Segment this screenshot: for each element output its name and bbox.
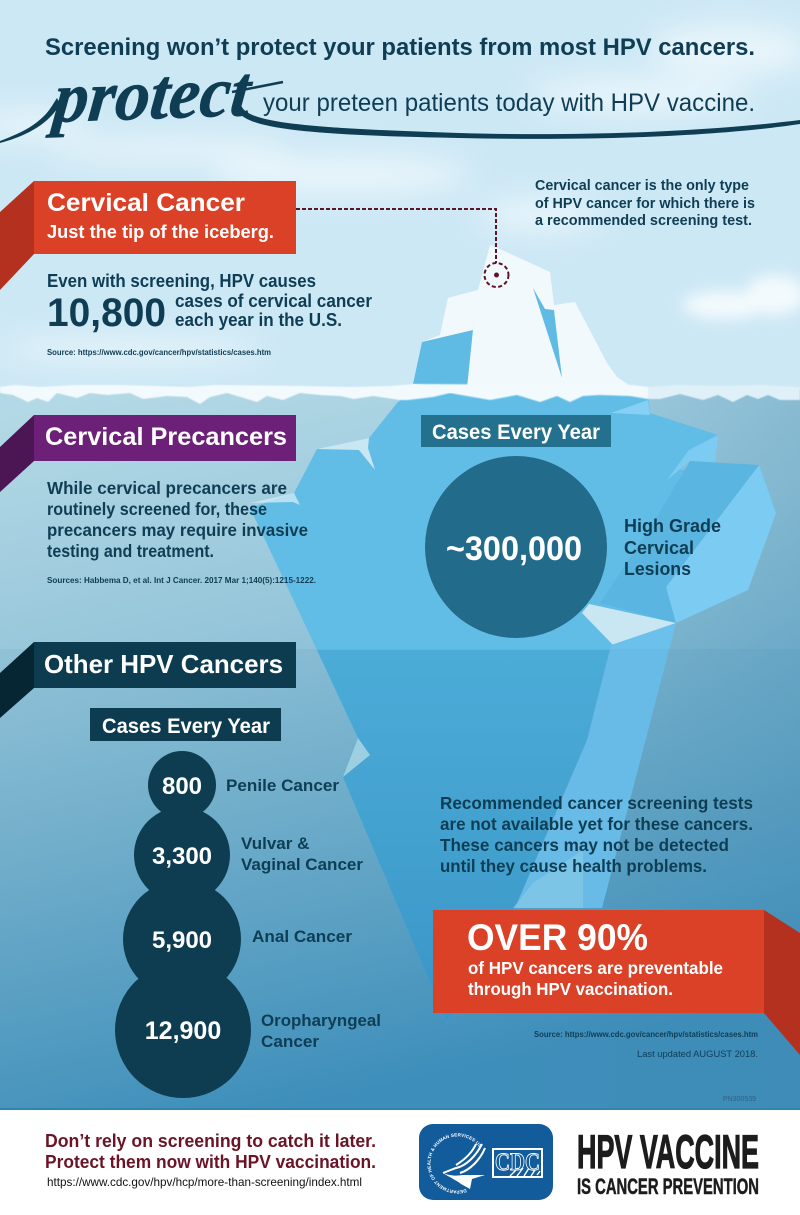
sky background	[0, 0, 800, 395]
deep water band	[0, 649, 800, 1110]
bubble chart: other HPV cancers: 5,900	[152, 927, 212, 954]
bubble chart: other HPV cancers: Anal Cancer	[252, 927, 352, 946]
iceberg below water	[250, 393, 776, 1023]
text: precancers paragraph: While cervical precancers are	[47, 478, 287, 498]
subtitle with script word: your preteen patients today with HPV vaccine.	[263, 89, 755, 117]
bubble: 300,000 lesions	[425, 456, 721, 638]
logo: HHS and CDC	[419, 1124, 553, 1200]
text: precancers paragraph: routinely screened for, these	[47, 499, 267, 519]
panel: other HPV cancers banner	[0, 642, 296, 718]
bubble chart: other HPV cancers: Oropharyngeal	[261, 1011, 381, 1030]
bubble: 300,000 lesions: Cervical	[624, 538, 694, 558]
panel: cervical precancers banner: Cervical Precancers	[45, 423, 287, 451]
foam at waterline	[0, 384, 800, 404]
logo: HHS and CDC: CDC	[495, 1149, 540, 1176]
heading: cases every year (precancers): Cases Every Year	[432, 421, 600, 444]
bubble: 300,000 lesions: Lesions	[624, 559, 691, 579]
text: precancers paragraph: testing and treatment.	[47, 541, 214, 561]
panel: over 90% banner: OVER 90%	[467, 917, 648, 958]
callout connector to iceberg tip	[296, 209, 508, 287]
iceberg above water	[410, 245, 632, 395]
source: precancers: Sources: Habbema D, et al. Int J Cancer. 2017 Mar 1;140(5):1215-1222.	[47, 575, 316, 585]
panel: over 90% banner: of HPV cancers are preventable	[468, 958, 723, 978]
footer message: Don’t rely on screening to catch it later.	[45, 1131, 376, 1151]
text: no screening tests available	[440, 793, 753, 876]
text: precancers paragraph: precancers may require invasive	[47, 520, 308, 540]
bubble chart: other HPV cancers: Vaginal Cancer	[241, 855, 363, 874]
text: no screening tests available: Recommended cancer screening tests	[440, 793, 753, 813]
darker deep section of iceberg	[317, 650, 611, 1023]
bubble: 300,000 lesions: ~300,000	[446, 530, 582, 568]
script word: protect: protect	[45, 51, 256, 138]
subtitle with script word	[0, 51, 800, 143]
footer message: https://www.cdc.gov/hpv/hcp/more-than-screening/index.html	[47, 1175, 362, 1189]
underwater background	[0, 390, 800, 1110]
text: tip callout	[535, 178, 755, 229]
panel: other HPV cancers banner: Other HPV Cancers	[44, 649, 283, 679]
footer message: Protect them now with HPV vaccination.	[45, 1152, 376, 1172]
text: no screening tests available: until they cause health problems.	[440, 856, 707, 876]
bubble chart: other HPV cancers: Cancer	[261, 1032, 319, 1051]
text: precancers paragraph	[47, 478, 308, 561]
panel: cervical cancer banner	[0, 181, 296, 290]
logo text: HPV vaccine is cancer prevention	[577, 1125, 759, 1199]
panel: over 90% banner	[433, 910, 800, 1055]
text: tip callout: of HPV cancer for which there is	[535, 196, 755, 212]
source and update note	[534, 1030, 758, 1060]
text: tip callout: Cervical cancer is the only type	[535, 178, 749, 194]
panel: cervical cancer banner: Cervical Cancer	[47, 189, 245, 217]
source and update note: Last updated AUGUST 2018.	[637, 1049, 758, 1060]
bubble chart: other HPV cancers	[115, 751, 381, 1098]
text: no screening tests available: are not available yet for these cancers.	[440, 814, 753, 834]
panel: cervical precancers banner	[0, 415, 296, 492]
bubble chart: other HPV cancers: Vulvar &	[241, 834, 309, 853]
text: cervical cancer statistic: 10,800	[47, 291, 166, 335]
text: tip callout: a recommended screening test.	[535, 213, 752, 229]
bubble chart: other HPV cancers: Penile Cancer	[226, 776, 339, 795]
bubble chart: other HPV cancers: 12,900	[145, 1017, 221, 1045]
heading: cases every year (precancers)	[421, 415, 611, 447]
source and update note: Source: https://www.cdc.gov/cancer/hpv/statistics/cases.htm	[534, 1030, 758, 1039]
footer message	[45, 1131, 376, 1189]
heading: cases every year (other cancers): Cases Every Year	[102, 715, 270, 738]
logo: HHS and CDC: DEPARTMENT OF HEALTH & HUMAN SERVICES USA	[427, 1133, 481, 1194]
panel: over 90% banner: through HPV vaccination.	[468, 979, 673, 999]
text: cervical cancer statistic: Even with screening, HPV causes	[47, 271, 316, 291]
heading: cases every year (other cancers)	[90, 708, 281, 741]
source: cervical cancer: Source: https://www.cdc.gov/cancer/hpv/statistics/cases.htm	[47, 348, 271, 357]
bubble: 300,000 lesions: High Grade	[624, 516, 721, 536]
bubble chart: other HPV cancers: 3,300	[152, 843, 212, 870]
bubble chart: other HPV cancers: 800	[162, 773, 202, 800]
text: no screening tests available: These cancers may not be detected	[440, 835, 729, 855]
text: cervical cancer statistic: each year in the U.S.	[175, 310, 342, 330]
text: cervical cancer statistic	[47, 271, 372, 335]
publication number: PN300539	[723, 1094, 756, 1103]
text: cervical cancer statistic: cases of cervical cancer	[175, 291, 372, 311]
title: Screening won’t protect your patients from most HPV cancers.	[45, 34, 755, 61]
panel: cervical cancer banner: Just the tip of the iceberg.	[47, 222, 274, 242]
